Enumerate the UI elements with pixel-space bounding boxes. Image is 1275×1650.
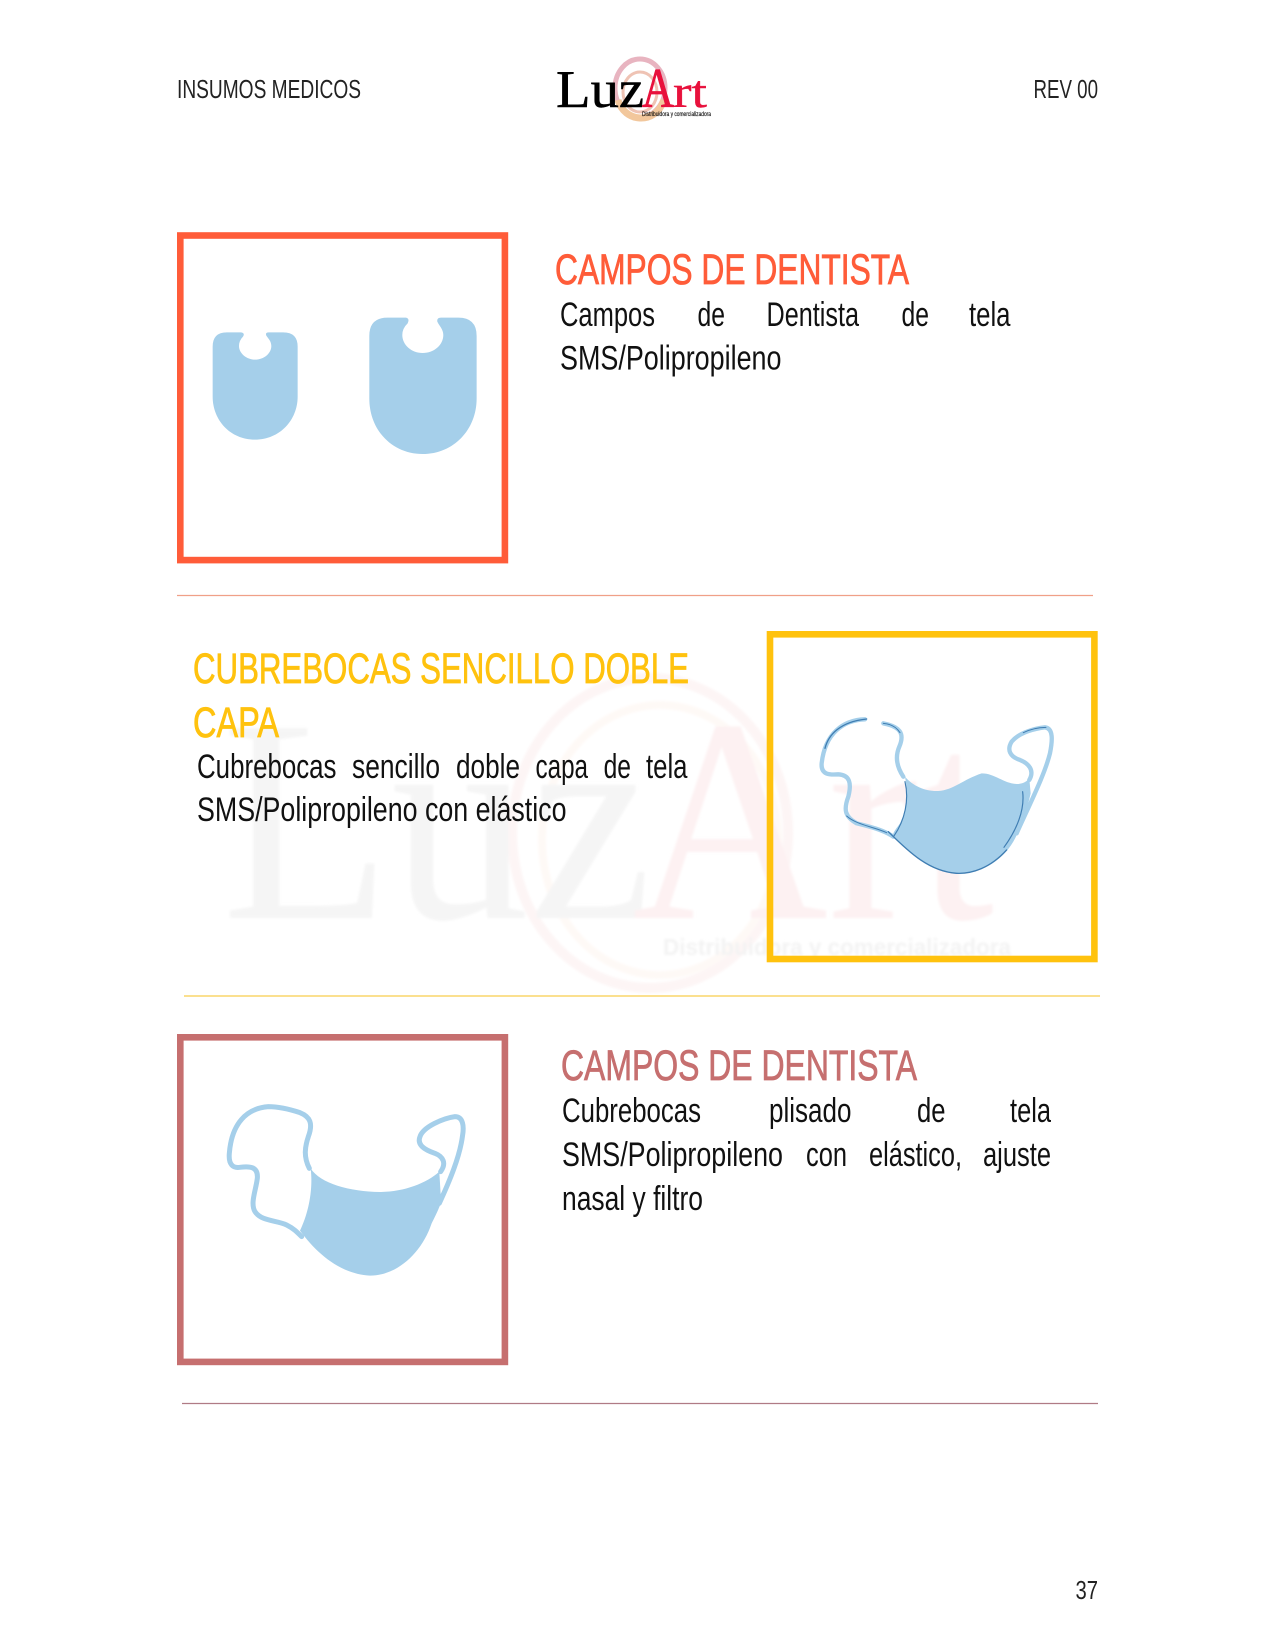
text block: campos de dentista description: Dentista (766, 296, 859, 334)
text block: cubrebocas plisado description: tela (1010, 1092, 1051, 1130)
text block: cubrebocas sencillo description: tela (646, 748, 688, 786)
panel: cubrebocas sencillo image frame (770, 634, 1094, 959)
header: section name: INSUMOS MEDICOS (177, 74, 361, 104)
text block: cubrebocas sencillo description: de (604, 748, 631, 786)
text block: cubrebocas plisado description: nasal y filtro (562, 1180, 703, 1218)
text block: cubrebocas plisado description: Cubrebocas (562, 1092, 701, 1130)
text block: cubrebocas plisado description: ajuste (983, 1136, 1051, 1174)
text block: cubrebocas sencillo description (197, 748, 688, 829)
icon: pleated face mask (229, 1107, 463, 1276)
heading: campos de dentista: CAMPOS DE DENTISTA (555, 246, 909, 294)
text block: cubrebocas plisado description: plisado (769, 1092, 852, 1130)
heading: campos de dentista (plisado): CAMPOS DE DENTISTA (561, 1042, 917, 1090)
watermark: LuzArt logo (222, 660, 1011, 988)
watermark: LuzArt logo: Art (632, 660, 995, 981)
text block: cubrebocas sencillo description: capa (536, 748, 588, 786)
heading: cubrebocas sencillo doble capa: CAPA (193, 699, 279, 747)
text block: cubrebocas sencillo description: doble (456, 748, 520, 786)
header: revision: REV 00 (1034, 74, 1098, 104)
text block: campos de dentista description: tela (969, 296, 1011, 334)
header: LuzArt logo: Luz (556, 61, 644, 119)
icon: double layer face mask (822, 719, 1052, 874)
text block: cubrebocas plisado description: de (917, 1092, 946, 1130)
heading: cubrebocas sencillo doble capa (193, 645, 689, 747)
text block: cubrebocas plisado description: con (806, 1136, 847, 1174)
header: LuzArt logo: rt (673, 66, 707, 117)
text block: campos de dentista description: de (698, 296, 725, 334)
text block: campos de dentista description: de (902, 296, 929, 334)
icon: large dental bib (369, 318, 477, 454)
text block: cubrebocas plisado description: SMS/Polipropileno (562, 1136, 783, 1174)
watermark: LuzArt logo: Distribuidora y comercializadora (663, 934, 1011, 960)
icon: small dental bib (213, 332, 298, 440)
heading: cubrebocas sencillo doble capa: CUBREBOCAS SENCILLO DOBLE (193, 645, 689, 693)
header: LuzArt logo (556, 58, 712, 120)
panel: cubrebocas plisado image frame (180, 1037, 505, 1362)
panel: campos de dentista image frame (180, 236, 505, 560)
header: LuzArt logo: A (642, 58, 674, 120)
header: LuzArt logo: Distribuidora y comercializadora (642, 112, 712, 118)
text block: campos de dentista description: Campos (560, 296, 655, 334)
text block: cubrebocas plisado description: elástico, (869, 1136, 962, 1174)
text block: cubrebocas sencillo description: Cubrebocas (197, 748, 336, 786)
text block: cubrebocas sencillo description: sencillo (352, 748, 440, 786)
page number: 37 (1076, 1575, 1098, 1605)
text block: cubrebocas plisado description (562, 1092, 1051, 1218)
text block: campos de dentista description (560, 296, 1011, 378)
watermark: LuzArt logo: Luz (222, 660, 652, 981)
text block: campos de dentista description: SMS/Polipropileno (560, 340, 782, 378)
text block: cubrebocas sencillo description: SMS/Polipropileno con elástico (197, 791, 566, 829)
